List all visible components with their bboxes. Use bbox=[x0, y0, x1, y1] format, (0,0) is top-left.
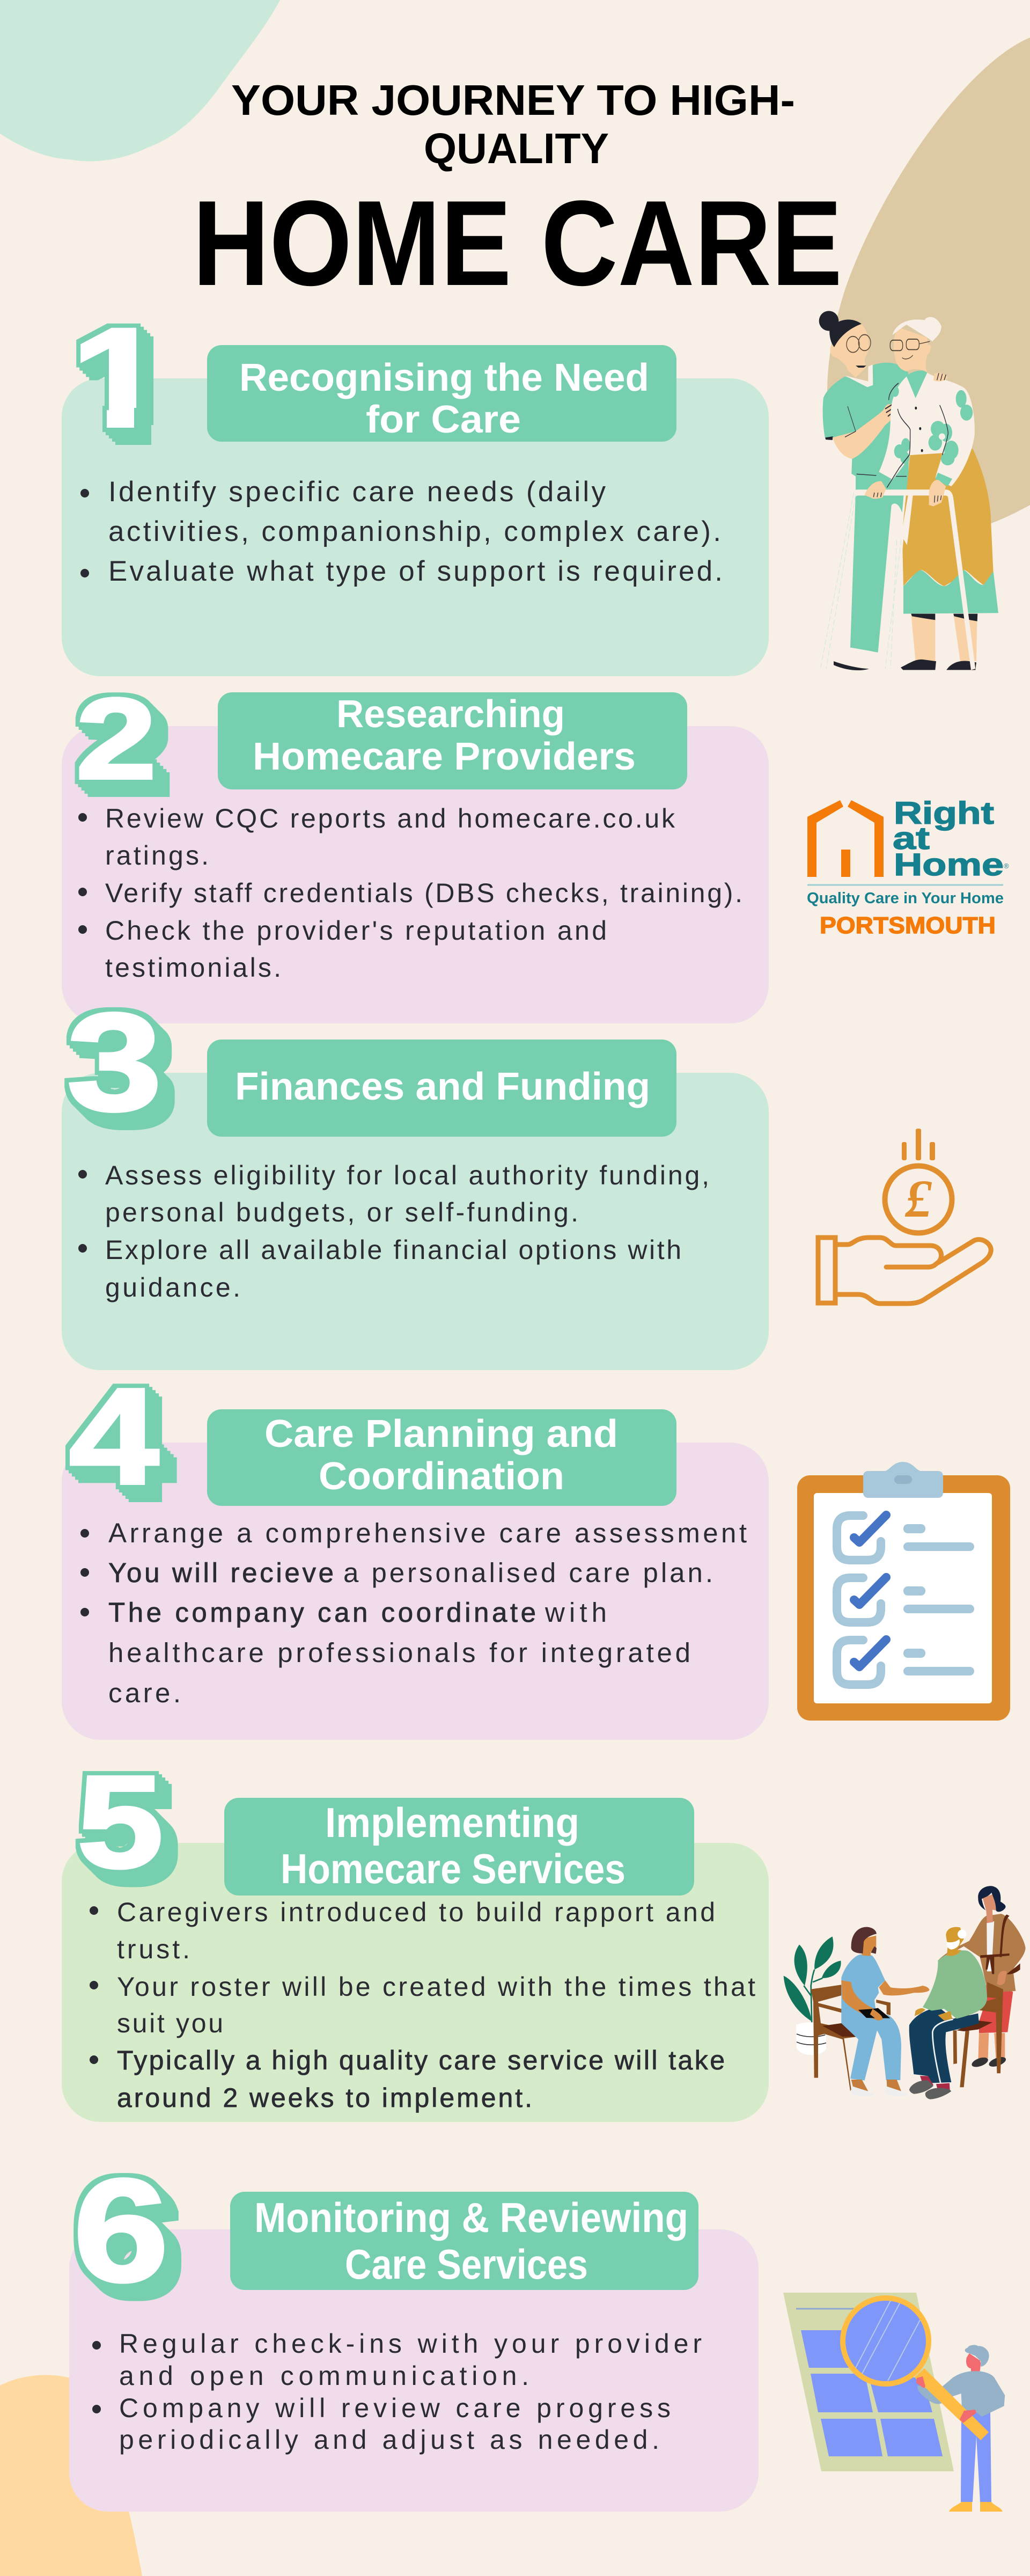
text block: step 3 bullets: Explore all available financial options with bbox=[105, 1235, 681, 1265]
panel: step 1 recognising the need for care bbox=[62, 298, 769, 676]
heading: step 6: Care Services bbox=[345, 2241, 588, 2288]
logo: Right at Home Portsmouth: ® bbox=[1004, 862, 1009, 870]
panel: step 5 implementing homecare services bbox=[62, 1748, 769, 2122]
text block: step 2 bullets: ratings. bbox=[105, 840, 209, 870]
text block: step 6 bullets: periodically and adjust as needed. bbox=[119, 2425, 659, 2455]
text block: step 5 bullets: Typically a high quality care service will take bbox=[117, 2045, 725, 2075]
panel: step 2 researching homecare providers bbox=[62, 675, 769, 1023]
heading: step 5: Homecare Services bbox=[281, 1845, 626, 1892]
heading: step 2: Researching bbox=[336, 693, 565, 736]
text block: step 2 bullets: Review CQC reports and homecare.co.uk bbox=[105, 803, 675, 833]
text block: step 6 bullets: and open communication. bbox=[119, 2361, 529, 2391]
number 1: 1 bbox=[71, 298, 166, 456]
blouse bbox=[876, 372, 975, 486]
illustration: carer with older woman and walking frame bbox=[819, 311, 998, 670]
heading: step 3: Finances and Funding bbox=[235, 1065, 650, 1108]
magnifying glass bbox=[915, 2368, 989, 2440]
text block: step 1 bullets bbox=[80, 476, 723, 587]
blob: top-right tan bbox=[827, 38, 1030, 523]
text block: step 2 bullets bbox=[78, 803, 742, 983]
text block: step 6 bullets bbox=[92, 2329, 702, 2455]
title bbox=[193, 76, 842, 311]
text block: step 5 bullets: Caregivers introduced to build rapport and bbox=[117, 1897, 715, 1927]
text block: step 6 bullets: Company will review care progress bbox=[119, 2393, 671, 2423]
panel: step 3 finances and funding bbox=[62, 985, 769, 1370]
text block: step 5 bullets: trust. bbox=[117, 1934, 190, 1964]
text block: step 4 bullets: The company can coordinate bbox=[108, 1597, 536, 1628]
text block: step 4 bullets: healthcare professionals for integrated bbox=[108, 1637, 690, 1668]
text block: step 5 bullets: suit you bbox=[117, 2008, 223, 2038]
heading: step 4 bbox=[207, 1409, 676, 1506]
blob: top-left mint bbox=[0, 0, 280, 162]
plant bbox=[784, 1936, 841, 2022]
text block: step 4 bullets: a personalised care plan. bbox=[343, 1557, 713, 1588]
nurse head bbox=[830, 324, 869, 378]
number 4: 4 bbox=[69, 1360, 160, 1512]
text block: step 4 bullets: with bbox=[545, 1597, 607, 1628]
logo: Right at Home Portsmouth: Home bbox=[894, 847, 1004, 882]
text block: step 2 bullets: Check the provider's reputation and bbox=[105, 916, 607, 946]
text block: step 3 bullets bbox=[78, 1160, 709, 1302]
text block: step 3 bullets: personal budgets, or self-funding. bbox=[105, 1197, 578, 1227]
number 3: 3 bbox=[67, 985, 161, 1139]
man bbox=[909, 2007, 979, 2083]
text block: step 3 bullets: guidance. bbox=[105, 1272, 240, 1302]
heading: step 1 bbox=[207, 345, 676, 442]
logo: Right at Home Portsmouth: at bbox=[893, 821, 930, 856]
walking frame bbox=[850, 489, 975, 670]
text block: step 4 bullets: care. bbox=[108, 1678, 181, 1708]
elder head bbox=[894, 328, 931, 372]
heading: step 2: Homecare Providers bbox=[253, 735, 636, 778]
text block: step 3 bullets: Assess eligibility for local authority funding, bbox=[105, 1160, 709, 1190]
icon: hand holding pound coin bbox=[818, 1129, 991, 1304]
panel: step 6 monitoring and reviewing care services bbox=[69, 2149, 759, 2512]
heading: step 3 bbox=[207, 1040, 676, 1137]
text block: step 1 bullets: Identify specific care needs (daily bbox=[108, 476, 606, 508]
text block: step 6 bullets: Regular check-ins with your provider bbox=[119, 2329, 702, 2359]
text block: step 5 bullets: Your roster will be created with the times that bbox=[117, 1972, 755, 2002]
title: YOUR JOURNEY TO HIGH- bbox=[231, 76, 795, 124]
title: QUALITY bbox=[424, 125, 609, 172]
heading: step 5 bbox=[224, 1798, 694, 1896]
icon: hand holding pound coin: £ bbox=[904, 1169, 932, 1228]
blob: bottom-left peach bbox=[0, 2375, 142, 2576]
heading: step 6: Monitoring & Reviewing bbox=[254, 2194, 688, 2241]
nurse bbox=[841, 2011, 901, 2081]
number 6: 6 bbox=[73, 2149, 168, 2312]
number 2: 2 bbox=[76, 675, 156, 803]
illustration: carer meeting client and family bbox=[784, 1886, 1026, 2099]
logo: Right at Home Portsmouth bbox=[807, 796, 1009, 939]
woman standing bbox=[979, 1973, 1013, 2033]
text block: step 4 bullets: Arrange a comprehensive care assessment bbox=[108, 1518, 747, 1548]
text block: step 5 bullets: around 2 weeks to implement. bbox=[117, 2083, 532, 2113]
text block: step 4 bullets bbox=[80, 1518, 747, 1708]
heading: step 1: for Care bbox=[366, 398, 521, 441]
text block: step 2 bullets: Verify staff credentials (DBS checks, training). bbox=[105, 878, 742, 908]
chair left bbox=[811, 1985, 860, 2091]
heading: step 5: Implementing bbox=[325, 1799, 579, 1846]
skirt bbox=[902, 449, 994, 586]
text block: step 1 bullets: Evaluate what type of support is required. bbox=[108, 555, 723, 587]
chair right bbox=[953, 2030, 957, 2064]
icon: clipboard checklist bbox=[797, 1462, 1010, 1721]
text block: step 5 bullets bbox=[90, 1897, 755, 2113]
person bbox=[961, 2412, 991, 2502]
heading: step 4: Coordination bbox=[319, 1455, 564, 1498]
number 5: 5 bbox=[77, 1748, 163, 1895]
panel: step 4 care planning and coordination bbox=[62, 1360, 769, 1740]
logo: Right at Home Portsmouth: PORTSMOUTH bbox=[820, 912, 996, 939]
heading: step 4: Care Planning and bbox=[264, 1413, 618, 1455]
text block: step 2 bullets: testimonials. bbox=[105, 953, 281, 983]
text block: step 4 bullets: You will recieve bbox=[108, 1557, 334, 1588]
text block: step 1 bullets: activities, companionship, complex care). bbox=[108, 516, 721, 547]
heading: step 1: Recognising the Need bbox=[239, 356, 649, 399]
logo: Right at Home Portsmouth: Quality Care in Your Home bbox=[807, 890, 1004, 907]
nurse body bbox=[823, 363, 908, 495]
logo: Right at Home Portsmouth: Right bbox=[894, 796, 994, 831]
title: HOME CARE bbox=[193, 175, 842, 311]
illustration: person with magnifying glass inspecting a document bbox=[783, 2293, 1005, 2512]
heading: step 6 bbox=[230, 2192, 698, 2290]
heading: step 2 bbox=[218, 692, 687, 789]
legs and shoes bbox=[911, 614, 977, 661]
